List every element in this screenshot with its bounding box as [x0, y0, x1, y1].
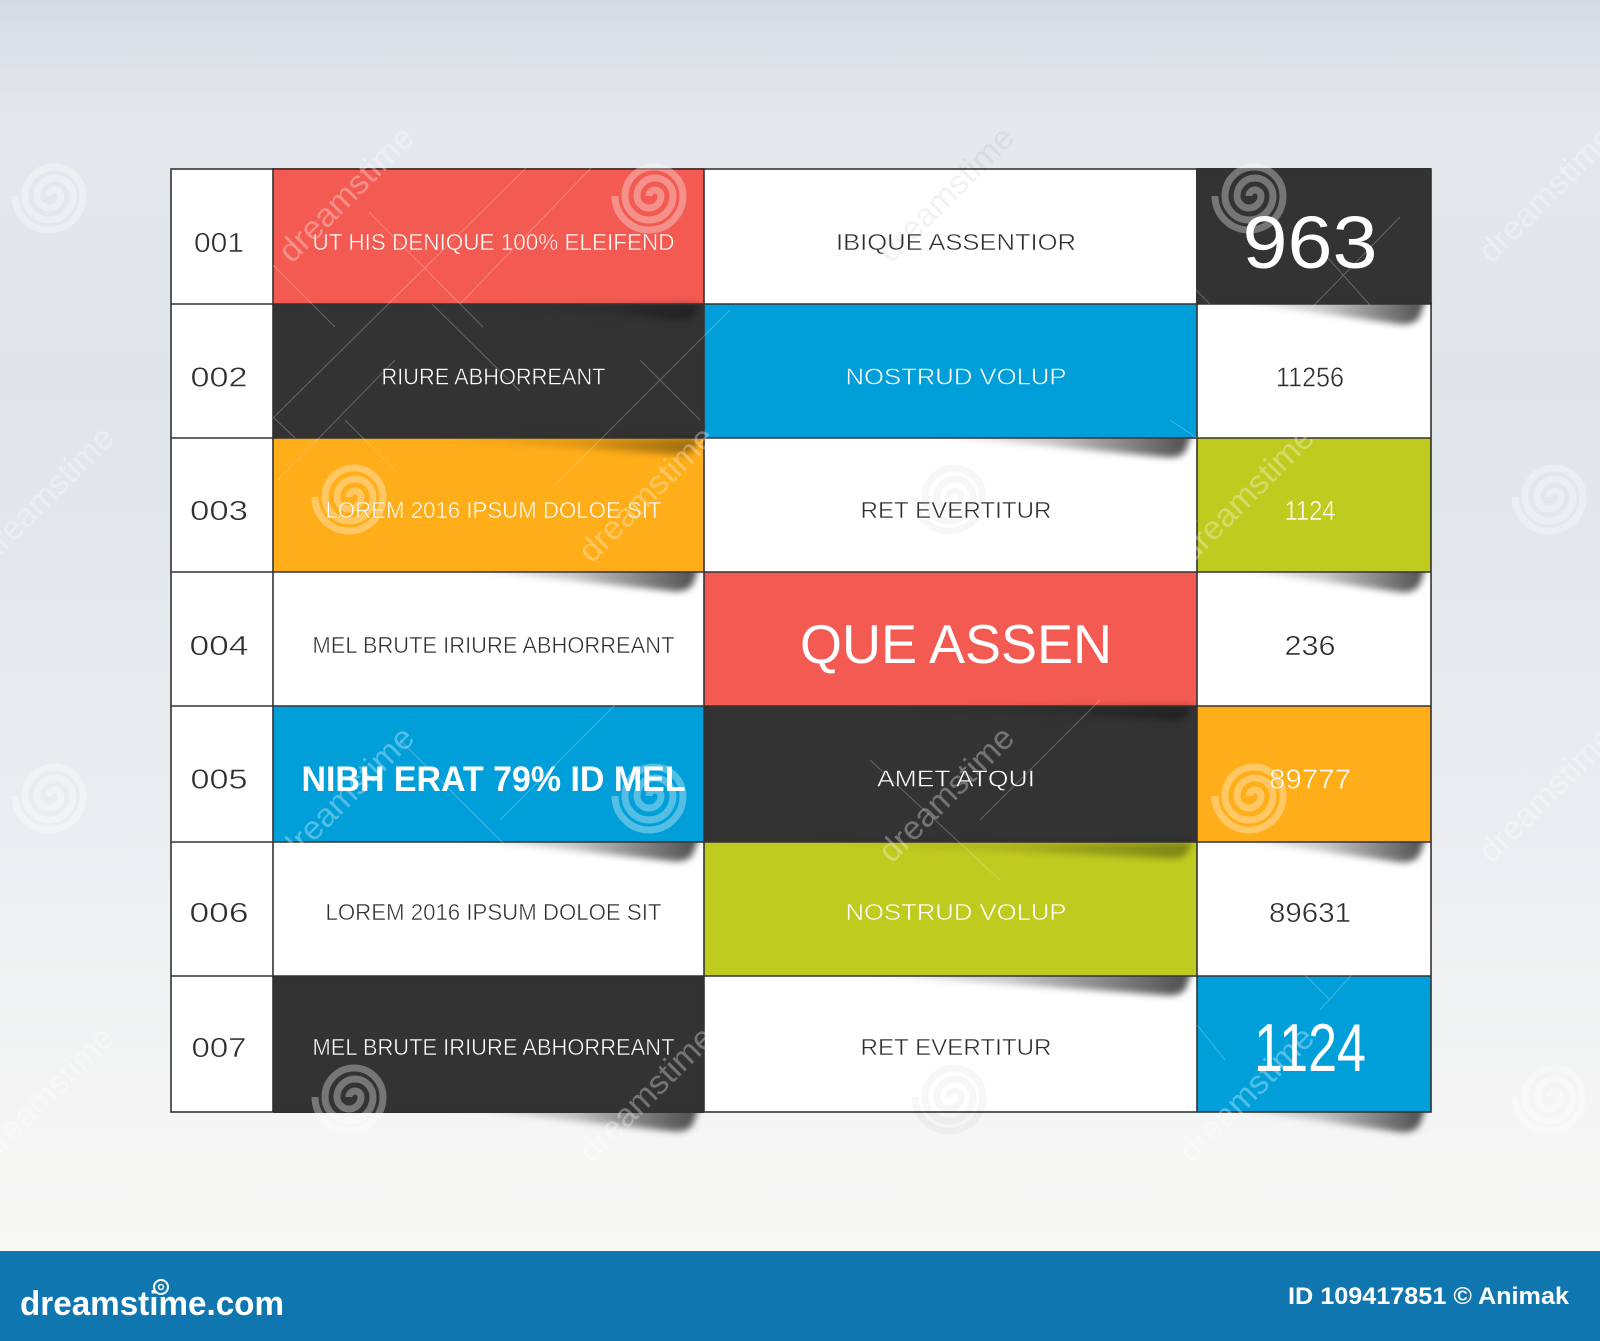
wedge shadows under raised cells — [420, 296, 1427, 1132]
column 4 values: 89631 — [1269, 897, 1351, 928]
column 2 labels: LOREM 2016 IPSUM DOLOE SIT — [326, 497, 662, 523]
watermark: dreamstime text repeats: dreamstime — [571, 1019, 721, 1169]
row numbers column: 006 — [190, 897, 248, 928]
watermark: dreamstime text repeats — [0, 119, 1600, 1169]
column 3 labels: NOSTRUD VOLUP — [846, 899, 1066, 925]
watermark: dreamstime text repeats: dreamstime — [271, 119, 421, 269]
watermark: dreamstime text repeats: dreamstime — [571, 419, 721, 569]
panel: table cells — [171, 168, 1431, 1113]
column 3 labels: IBIQUE ASSENTIOR — [836, 229, 1076, 255]
row numbers column — [190, 227, 248, 1063]
column 3 labels: RET EVERTITUR — [860, 497, 1052, 523]
column 3 labels: NOSTRUD VOLUP — [846, 364, 1066, 390]
column 2 labels — [302, 229, 686, 1060]
watermark: dreamstime text repeats: dreamstime — [871, 719, 1021, 869]
column 4 values — [1242, 201, 1378, 1086]
row numbers column: 004 — [190, 630, 248, 661]
column 2 labels: MEL BRUTE IRIURE ABHORREANT — [312, 632, 674, 658]
column 4 values: 236 — [1284, 630, 1336, 661]
column 4 values: 89777 — [1269, 764, 1351, 794]
column 4 values: 11256 — [1276, 362, 1344, 392]
column 2 labels: LOREM 2016 IPSUM DOLOE SIT — [326, 899, 662, 925]
row numbers column: 002 — [190, 362, 248, 392]
column 4 values: 963 — [1242, 201, 1378, 284]
column 3 labels: RET EVERTITUR — [860, 1034, 1052, 1060]
column 2 labels: MEL BRUTE IRIURE ABHORREANT — [312, 1034, 674, 1060]
table grid lines — [171, 168, 1432, 1112]
row numbers column: 003 — [190, 495, 248, 526]
column 2 labels: UT HIS DENIQUE 100% ELEIFEND — [312, 229, 674, 255]
footer bar — [0, 1251, 1600, 1341]
row numbers column: 001 — [194, 227, 244, 258]
row numbers column: 005 — [190, 764, 248, 794]
raised cells repainted above their own shadow — [273, 168, 1431, 1113]
column 2 labels: RIURE ABHORREANT — [382, 364, 606, 390]
watermark: dreamstime text repeats: dreamstime — [871, 119, 1021, 269]
footer image id and credit: ID 109417851 © Animak — [1288, 1283, 1570, 1310]
column 4 values: 1124 — [1254, 1010, 1366, 1086]
column 3 labels: QUE ASSEN — [800, 613, 1112, 675]
column 3 labels: AMET ATQUI — [877, 766, 1035, 792]
watermark: spirals — [15, 167, 1583, 1131]
column 3 labels — [800, 229, 1112, 1060]
column 4 values: 1124 — [1284, 495, 1336, 526]
row numbers column: 007 — [192, 1032, 246, 1063]
shadows cast on the dark and coloured cells below — [420, 304, 1193, 858]
footer logo: dreamstime.com — [20, 1285, 284, 1323]
watermark: dreamstime text repeats: dreamstime — [1171, 419, 1321, 569]
watermark: diagonal lattice lines — [273, 168, 1400, 1060]
column 2 labels: NIBH ERAT 79% ID MEL — [302, 760, 686, 799]
watermark: dreamstime text repeats: dreamstime — [1171, 1019, 1321, 1169]
watermark: dreamstime text repeats: dreamstime — [271, 719, 421, 869]
